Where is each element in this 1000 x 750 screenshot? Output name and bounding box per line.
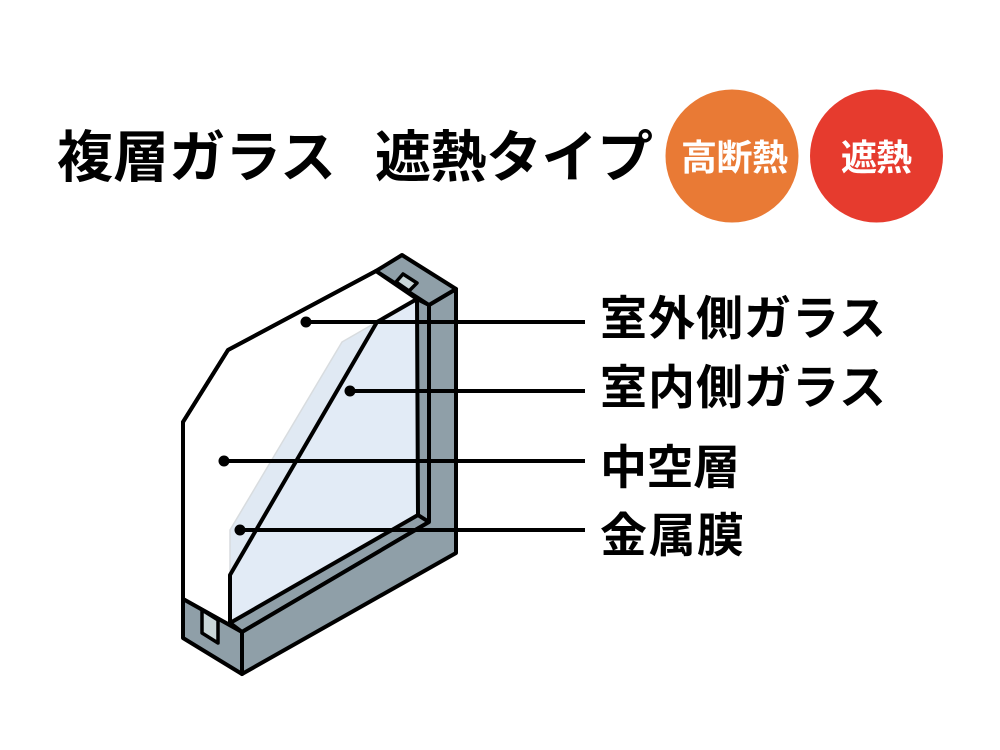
outdoor glass pane <box>183 271 417 632</box>
title <box>57 126 653 189</box>
badge: heat shielding <box>810 90 943 222</box>
leader: indoor glass <box>344 386 585 396</box>
leader: metal film <box>234 524 585 536</box>
badge: high insulation <box>666 90 798 222</box>
spacer frame: top end face <box>376 255 456 305</box>
glass outlines <box>183 271 417 623</box>
top slot <box>396 274 417 291</box>
badge: heat shielding: 遮熱 <box>841 137 912 178</box>
spacer frame: outer face <box>242 289 456 674</box>
spacer frame: bottom channel <box>230 515 429 632</box>
bottom slot <box>202 610 218 643</box>
label: outdoor glass: 室外側ガラス <box>600 292 886 345</box>
label: air layer: 中空層 <box>600 441 740 494</box>
label: metal film: 金属膜 <box>600 509 744 562</box>
leader: outdoor glass <box>300 316 585 328</box>
badge: high insulation: 高断熱 <box>681 137 788 178</box>
metal film <box>230 323 375 572</box>
diagram: double glazed window cross-section <box>183 255 456 674</box>
spacer frame: inner vertical face <box>417 299 429 522</box>
label: indoor glass: 室内側ガラス <box>600 361 886 414</box>
spacer frame: bottom end face <box>183 599 242 674</box>
leader: air layer <box>218 456 585 466</box>
title: 複層ガラス <box>57 126 336 189</box>
spacer frame: right side face <box>242 289 456 674</box>
indoor glass pane <box>230 299 418 623</box>
title: 遮熱タイプ <box>375 126 653 189</box>
